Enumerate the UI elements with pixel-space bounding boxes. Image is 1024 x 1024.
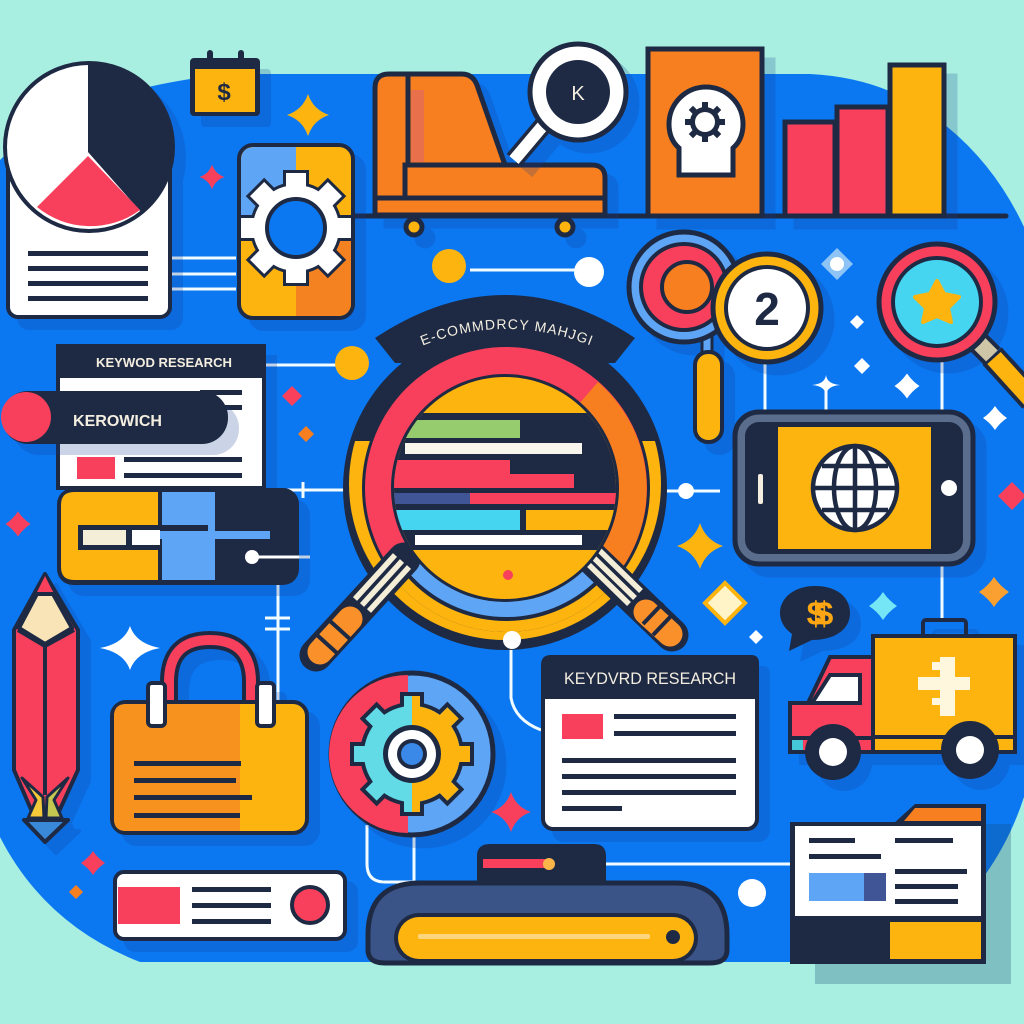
banner title: E-COMMDRCY MAHJGI: [420, 319, 593, 346]
panel: keyword research document: [56, 345, 266, 488]
bar chart: [785, 65, 944, 216]
orange sofa: [375, 74, 605, 235]
magnifier number 2: 2: [754, 283, 780, 335]
handle left: [316, 555, 409, 655]
icon: dollar calendar: $: [217, 79, 231, 106]
gear circle: [329, 673, 493, 835]
dollar speech bubble: $$: [807, 595, 833, 632]
magnifier K: K: [571, 83, 585, 105]
shopping bag: [112, 640, 307, 833]
heading: KEYWOD RESEARCH: [96, 355, 232, 370]
panel: keyword research document lower: [541, 655, 759, 829]
delivery truck: [790, 620, 1015, 780]
orange book with gear: [648, 49, 762, 216]
gear: [238, 170, 354, 286]
gear: [350, 692, 474, 816]
handle right: [587, 550, 673, 635]
magnifier star: [879, 244, 1024, 400]
banner: [375, 295, 635, 363]
heading: KEYDVRD RESEARCH: [564, 669, 736, 688]
sparkle: [200, 164, 224, 190]
icon: dollar calendar: [190, 50, 260, 116]
lens with bars: [390, 374, 621, 602]
central magnifier: [300, 295, 688, 672]
search pill: [1, 391, 228, 444]
gear hub: [383, 725, 441, 783]
connector lines: [172, 258, 942, 882]
card with bars: [57, 488, 299, 585]
tablet with globe: [735, 412, 973, 564]
connector dots: [335, 249, 694, 499]
magnifier red: [629, 232, 739, 442]
connector dot: [503, 631, 521, 649]
shelf line: [355, 214, 1006, 218]
sparkle: [287, 94, 329, 136]
search pill: KEROWICH: [73, 413, 162, 430]
pencil: [14, 574, 78, 842]
dollar speech bubble: [780, 586, 850, 651]
gear phone card: [238, 145, 354, 318]
pie chart document: [5, 63, 173, 317]
gear right half: [412, 696, 470, 812]
magnifier number 2: [713, 254, 821, 362]
small card: [115, 872, 345, 939]
conveyor search bar: [368, 844, 727, 963]
gear: [685, 102, 725, 142]
connector dot: [738, 879, 766, 907]
icon: globe: [813, 446, 897, 530]
sparkles: [6, 248, 1024, 899]
folder document: [790, 804, 986, 964]
magnifier K: [514, 44, 626, 160]
